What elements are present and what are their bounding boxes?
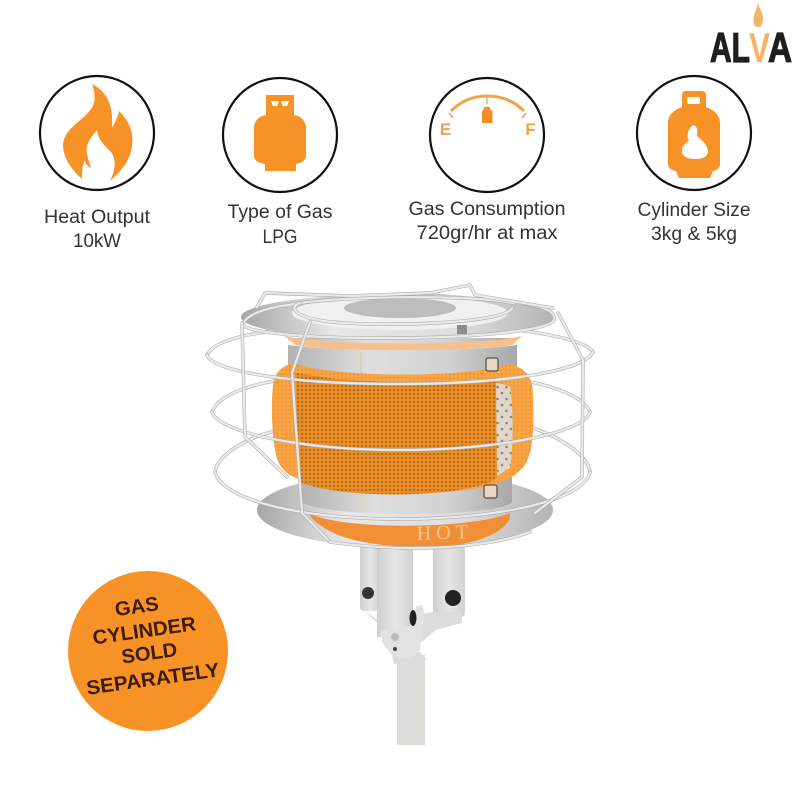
label: heat output: 10kW	[73, 231, 121, 252]
heater stem and pole	[360, 545, 465, 745]
callout text: SEPARATELY	[85, 659, 222, 700]
heater lower band	[302, 470, 512, 514]
callout text	[75, 586, 222, 700]
label: type of gas: Type of Gas	[228, 202, 332, 223]
wire guard: front rings and struts	[207, 285, 593, 548]
label: cylinder size	[638, 200, 750, 245]
logo: ALVA: AL	[710, 24, 750, 71]
top plate	[241, 293, 555, 350]
icon: flame	[40, 76, 154, 190]
label: cylinder size: 3kg & 5kg	[651, 224, 737, 245]
label: type of gas	[228, 202, 332, 248]
logo: ALVA	[710, 3, 792, 71]
logo: ALVA: A	[768, 24, 792, 71]
label: gas consumption: Gas Consumption	[408, 199, 566, 220]
callout text: GAS	[113, 593, 160, 621]
callout text: CYLINDER	[91, 613, 198, 649]
callout: gas cylinder sold separately	[68, 571, 228, 731]
label: heat output: Heat Output	[44, 207, 151, 228]
icon: LPG cylinder	[223, 78, 337, 192]
callout text: SOLD	[120, 639, 179, 669]
label: gas consumption: 720gr/hr at max	[416, 223, 558, 244]
label: heat output	[44, 207, 151, 252]
label: cylinder size: Cylinder Size	[638, 200, 750, 221]
heater illustration	[207, 285, 593, 745]
icon: cylinder with flame	[637, 76, 751, 190]
icon: fuel gauge	[430, 78, 544, 192]
spec: cylinder size	[637, 76, 751, 245]
lower plate with HOT embossing: HOT	[416, 521, 473, 545]
icon: fuel gauge: F	[525, 120, 536, 139]
spec: gas consumption	[408, 78, 566, 244]
lower plate with HOT embossing	[257, 472, 553, 548]
orange mesh burner	[272, 363, 533, 494]
label: gas consumption	[408, 199, 566, 244]
heater upper body	[288, 338, 517, 395]
logo: ALVA: V	[749, 24, 770, 71]
wire rings: back halves	[207, 329, 593, 472]
label: type of gas: LPG	[262, 227, 298, 248]
perforated strap and clamps	[484, 358, 513, 498]
icon: fuel gauge: E	[440, 120, 451, 139]
spec: type of gas	[223, 78, 337, 248]
spec: heat output	[40, 76, 154, 252]
